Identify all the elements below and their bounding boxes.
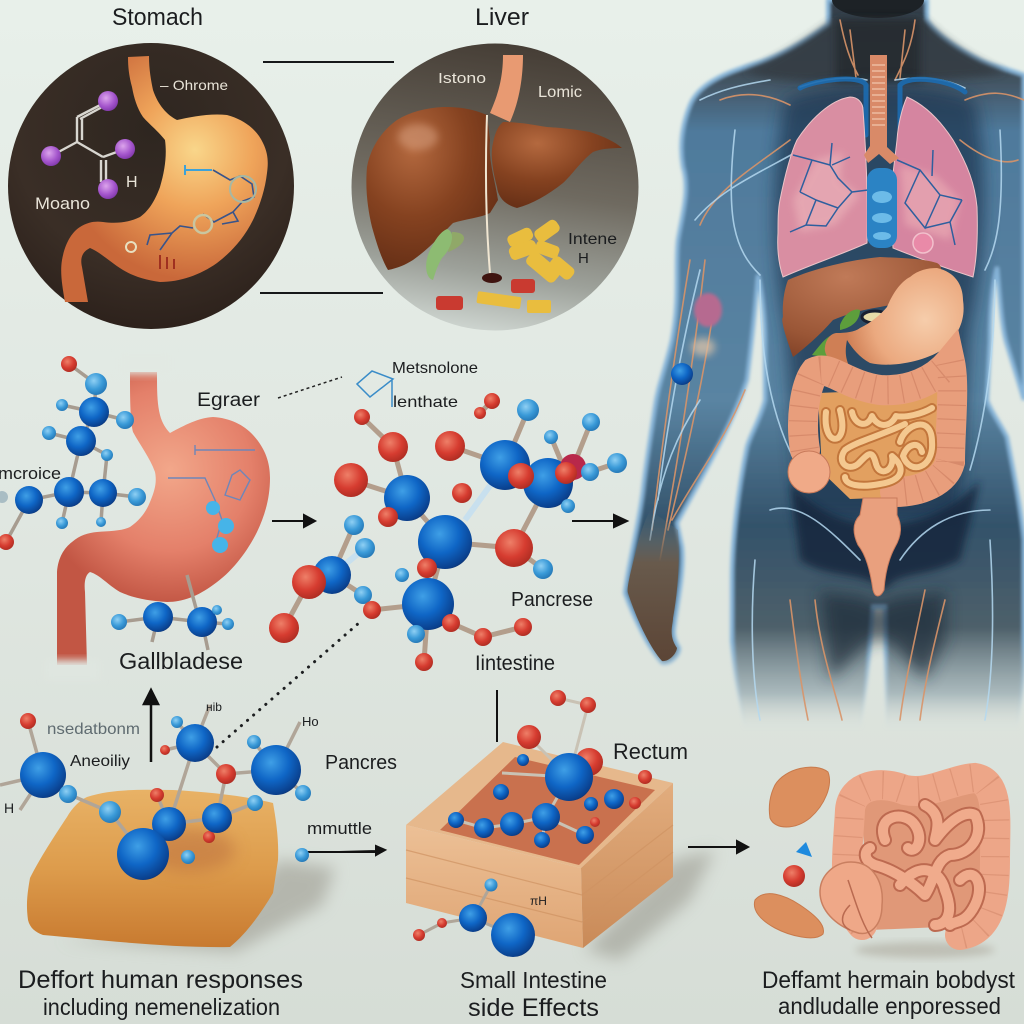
molecule: purple xyxy=(41,91,135,199)
dotted connector xyxy=(217,622,360,747)
box interior xyxy=(440,757,655,865)
label: H: H xyxy=(578,250,589,267)
label: nsedatbonm: nsedatbonm xyxy=(47,721,140,738)
panel: middle stomach xyxy=(0,352,270,680)
dark spot xyxy=(482,273,502,283)
panel: large intestines xyxy=(754,767,995,958)
label: Aneoiliy: Aneoiliy xyxy=(70,753,130,770)
icon: small molecule and arrow xyxy=(295,846,385,862)
label: Intestine: Iintestine xyxy=(475,652,555,675)
connector lines between circles xyxy=(260,62,394,293)
organ: cecum crease xyxy=(842,880,872,938)
groin shading xyxy=(820,590,945,680)
body intestines xyxy=(788,362,952,596)
liver left lobe xyxy=(366,107,498,270)
arrow: up xyxy=(144,690,158,762)
label: Liver: Liver xyxy=(475,4,529,31)
heart column xyxy=(867,168,897,248)
box right xyxy=(581,783,673,948)
stomach organ xyxy=(57,372,270,665)
molecule: below box xyxy=(413,878,535,957)
liver right lobe xyxy=(492,122,622,208)
stomach fade bottom xyxy=(45,660,100,680)
caption: middle xyxy=(460,967,607,1022)
large intestine xyxy=(803,362,952,492)
blood vessels xyxy=(650,20,1024,720)
small blue triangle xyxy=(796,842,812,857)
elbow organ xyxy=(694,293,722,327)
small intestine base xyxy=(818,388,945,499)
caption: middle: Small Intestine xyxy=(460,967,607,993)
dashed arrow to Metsnolone xyxy=(278,377,342,398)
organ: cecum xyxy=(820,862,882,933)
elbow glow xyxy=(691,338,715,356)
bile thread xyxy=(486,115,490,273)
body liver xyxy=(782,257,941,357)
label: Intene: Intene xyxy=(568,231,617,248)
molecule: large central xyxy=(269,393,627,671)
molecule on sponge xyxy=(0,705,311,880)
label: Ohrome: – Ohrome xyxy=(160,77,228,93)
gallbladder and bile xyxy=(812,310,888,358)
stomach organ xyxy=(61,56,268,302)
caption: middle: side Effects xyxy=(468,994,599,1022)
label: H: H xyxy=(126,174,138,191)
label: Stomach: Stomach xyxy=(112,4,203,31)
label: Rectum: Rectum xyxy=(613,739,688,764)
vertical line xyxy=(496,690,498,742)
panel: sponge with molecule xyxy=(0,705,335,952)
label: H: H xyxy=(4,800,14,816)
panel: human body anatomy xyxy=(625,0,1024,727)
label: Lomic: Lomic xyxy=(538,84,582,101)
large intestine segments xyxy=(803,362,952,492)
label: Metsnolone: Metsnolone xyxy=(392,360,478,377)
organ: upper lobe xyxy=(769,767,829,827)
caption: left: Deffort human responses xyxy=(18,966,303,994)
caption: right: Deffamt hermain bobdyst xyxy=(762,967,1015,994)
organ: colon xyxy=(847,778,995,935)
organ: coil outlines xyxy=(866,805,979,925)
organ: intestine body xyxy=(860,790,990,930)
yellow pills xyxy=(476,218,576,313)
circle background xyxy=(8,43,294,329)
rectum xyxy=(854,498,901,596)
small intestine coils outline xyxy=(826,408,932,486)
organ: colon segments xyxy=(847,778,995,935)
molecules in box xyxy=(448,690,652,848)
label: ніb: ніb xyxy=(206,700,222,714)
stomach chemical structure xyxy=(126,165,256,269)
organ: shadow xyxy=(855,942,995,958)
sponge xyxy=(27,790,278,947)
arrow: molecule to body xyxy=(572,515,627,527)
label: mmuttle: mmuttle xyxy=(307,819,372,838)
organ: lower lobe xyxy=(754,894,823,938)
molecule: bottom xyxy=(111,575,234,650)
neck shading xyxy=(836,18,920,82)
box folds xyxy=(406,825,673,922)
cecum xyxy=(788,451,830,493)
label: lenthate: lenthate xyxy=(393,394,458,411)
sponge dent xyxy=(145,828,235,872)
chest shading xyxy=(774,85,984,520)
label: πH: πH xyxy=(530,894,547,908)
panel: liver circle xyxy=(260,44,638,330)
circle background xyxy=(352,44,638,330)
box front xyxy=(406,825,583,948)
arm node xyxy=(671,363,693,385)
icon: chemical diamond xyxy=(357,371,393,407)
label: Ho: Ho xyxy=(302,714,319,729)
label: Egraer: Egraer xyxy=(197,390,261,411)
label: Moano: Moano xyxy=(35,194,90,213)
head chin xyxy=(832,0,924,18)
lungs xyxy=(778,97,977,277)
panel: stomach circle xyxy=(8,43,294,329)
caption: left xyxy=(18,966,303,1020)
molecule: left chain xyxy=(0,356,146,550)
gallbladder xyxy=(426,229,464,280)
panel: open box xyxy=(406,690,715,960)
hand xyxy=(628,510,679,661)
box back wall xyxy=(406,742,673,868)
red pills xyxy=(436,279,535,310)
label: Pancrese middle: Pancrese xyxy=(511,589,593,611)
small red ball xyxy=(783,865,805,887)
sponge shadow xyxy=(60,860,335,952)
box shadow xyxy=(585,850,715,960)
liver highlight xyxy=(398,124,438,150)
label: Pancres: Pancres xyxy=(325,752,397,774)
shoulders dark xyxy=(745,20,1005,81)
pelvis shading xyxy=(790,480,980,590)
liver duct xyxy=(490,55,523,122)
stomach fade top xyxy=(120,352,170,374)
label: Istono: Istono xyxy=(438,70,486,87)
arrow: stomach to molecule xyxy=(272,515,315,527)
stomach chemical structure xyxy=(168,445,255,553)
small intestine coils fill xyxy=(826,408,932,486)
label: Gallbladese: Gallbladese xyxy=(119,648,243,674)
caption: right: andludalle enporessed xyxy=(778,993,1001,1019)
organ: coil fill xyxy=(866,805,979,925)
body silhouette xyxy=(625,0,1024,727)
arrow: box to intestines xyxy=(688,841,748,853)
caption: left: including nemenelization xyxy=(43,994,280,1020)
caption: right xyxy=(762,967,1015,1019)
windpipe xyxy=(864,55,899,164)
body stomach xyxy=(825,268,964,368)
